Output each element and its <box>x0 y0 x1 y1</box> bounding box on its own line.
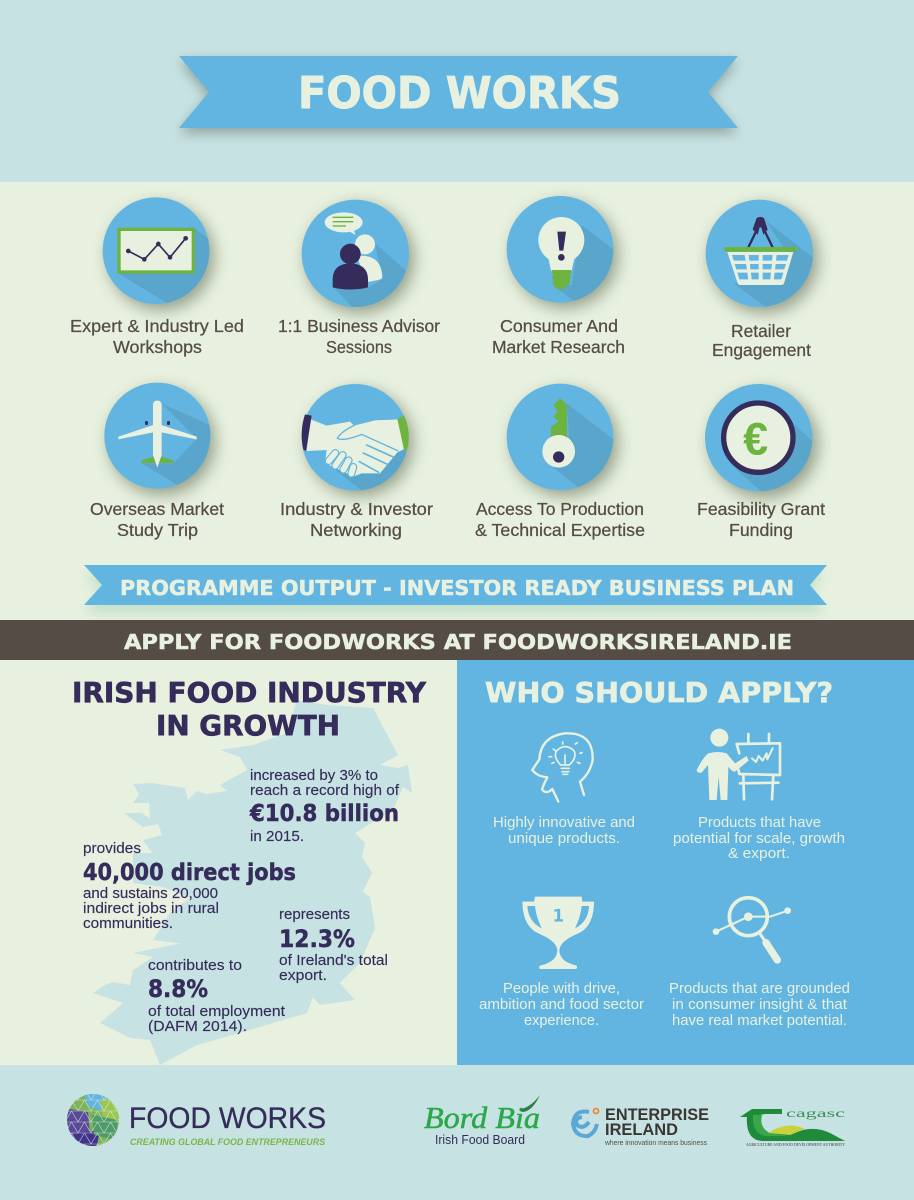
stat: employment: (DAFM 2014). <box>148 1018 247 1035</box>
stat: export value: €10.8 billion <box>249 801 399 827</box>
stat: employment: of total employment <box>148 1003 286 1020</box>
logo: Enterprise Ireland: ENTERPRISE <box>605 1106 709 1124</box>
criterion: drive: experience. <box>524 1012 599 1029</box>
criterion: innovative: unique products. <box>508 830 620 847</box>
service: grant funding: Funding <box>729 520 793 540</box>
service: retailer engagement: Engagement <box>712 340 811 360</box>
service: investor networking: Industry & Investor <box>280 499 433 519</box>
logo: Enterprise Ireland: where innovation means business <box>604 1138 707 1147</box>
stat: employment: contributes to <box>148 957 242 974</box>
programme output ribbon <box>83 565 827 613</box>
stat: employment <box>148 957 286 1035</box>
logo: Enterprise Ireland: IRELAND <box>605 1121 678 1139</box>
service: advisor sessions <box>278 200 440 357</box>
service: workshops <box>70 197 244 357</box>
logo: Teagasc: AGRICULTURE AND FOOD DEVELOPMENT AUTHORITY <box>746 1142 846 1147</box>
logo: Enterprise Ireland <box>573 1106 709 1147</box>
service: market research: Market Research <box>492 337 625 357</box>
background: services panel <box>0 182 914 620</box>
apply band: APPLY FOR FOODWORKS AT FOODWORKSIRELAND.IE <box>124 630 792 654</box>
service: production access <box>475 384 645 540</box>
criterion: insight: in consumer insight & that <box>672 996 848 1013</box>
service: retailer engagement <box>706 200 818 360</box>
criterion: drive: People with drive, <box>503 980 620 997</box>
stat: export share: represents <box>279 906 350 923</box>
stat: export value <box>249 767 400 845</box>
stat: jobs <box>83 840 296 932</box>
stat: export share: export. <box>279 967 327 984</box>
panel: footer logos <box>0 1065 914 1200</box>
service: advisor sessions: 1:1 Business Advisor <box>278 316 440 336</box>
stat: jobs: communities. <box>83 915 173 932</box>
service: market research: Consumer And <box>500 316 618 336</box>
service: workshops: Expert & Industry Led <box>70 316 244 336</box>
programme output ribbon: PROGRAMME OUTPUT - INVESTOR READY BUSINESS PLAN <box>120 576 794 600</box>
background: header band <box>0 0 914 182</box>
service: investor networking <box>280 384 433 540</box>
title: FOOD WORKS <box>298 68 621 119</box>
logo: Teagasc <box>740 1106 846 1147</box>
stat: export value: in 2015. <box>250 828 304 845</box>
criterion: drive <box>479 897 644 1029</box>
service: study trip: Study Trip <box>117 520 198 540</box>
service: grant funding <box>697 384 825 540</box>
apply band <box>0 620 914 660</box>
criterion: insight <box>669 898 850 1029</box>
stat: jobs: and sustains 20,000 <box>83 885 218 902</box>
service: investor networking: Networking <box>310 520 402 540</box>
logo: Bord Bia <box>424 1095 540 1147</box>
stat: export share: 12.3% <box>279 925 355 953</box>
service: advisor sessions: Sessions <box>326 337 392 357</box>
service: workshops: Workshops <box>113 337 202 357</box>
service: production access: & Technical Expertise <box>475 520 645 540</box>
stat: export share: of Ireland's total <box>279 952 388 969</box>
service: retailer engagement: Retailer <box>731 321 791 341</box>
stat: jobs: 40,000 direct jobs <box>83 860 296 886</box>
logo: Bord Bia: Irish Food Board <box>435 1133 525 1147</box>
criterion: insight: have real market potential. <box>672 1012 847 1029</box>
logo: Bord Bia: Bord Bia <box>424 1100 540 1135</box>
panel: programme services <box>70 196 825 540</box>
criterion: scalable <box>673 729 845 862</box>
service: study trip <box>90 383 224 540</box>
stat: export share <box>279 906 388 984</box>
logo: Food Works: CREATING GLOBAL FOOD ENTREPRENEURS <box>130 1137 326 1148</box>
service: grant funding: € <box>743 413 768 464</box>
criterion: scalable: & export. <box>728 845 790 862</box>
criterion: drive: 1 <box>553 907 564 926</box>
map of Ireland <box>93 700 412 1065</box>
criterion: scalable: potential for scale, growth <box>673 830 845 847</box>
service: production access: Access To Production <box>476 499 644 519</box>
heading: IN GROWTH <box>156 709 340 742</box>
heading: IRISH FOOD INDUSTRY <box>72 676 427 709</box>
logo globe <box>67 1094 119 1146</box>
criterion: insight: Products that are grounded <box>669 980 850 997</box>
panel: Irish food industry in growth <box>0 660 457 1065</box>
service: grant funding: Feasibility Grant <box>697 499 825 519</box>
logo: Teagasc: cagasc <box>786 1106 845 1120</box>
stat: employment: 8.8% <box>148 975 208 1003</box>
criterion: innovative <box>493 733 635 847</box>
title ribbon <box>179 56 738 133</box>
heading: WHO SHOULD APPLY? <box>485 676 833 709</box>
criterion: drive: ambition and food sector <box>479 996 644 1013</box>
criterion: scalable: Products that have <box>698 814 821 831</box>
panel: who should apply <box>457 660 914 1065</box>
logo: Food Works: FOOD WORKS <box>129 1102 326 1135</box>
stat: export value: increased by 3% to <box>250 767 378 784</box>
logo: Food Works <box>67 1094 325 1146</box>
stat: jobs: provides <box>83 840 141 857</box>
service: market research <box>492 196 625 357</box>
heading <box>72 676 427 742</box>
service: study trip: Overseas Market <box>90 499 224 519</box>
stat: jobs: indirect jobs in rural <box>83 900 219 917</box>
criterion: innovative: Highly innovative and <box>493 814 635 831</box>
stat: export value: reach a record high of <box>250 782 400 799</box>
